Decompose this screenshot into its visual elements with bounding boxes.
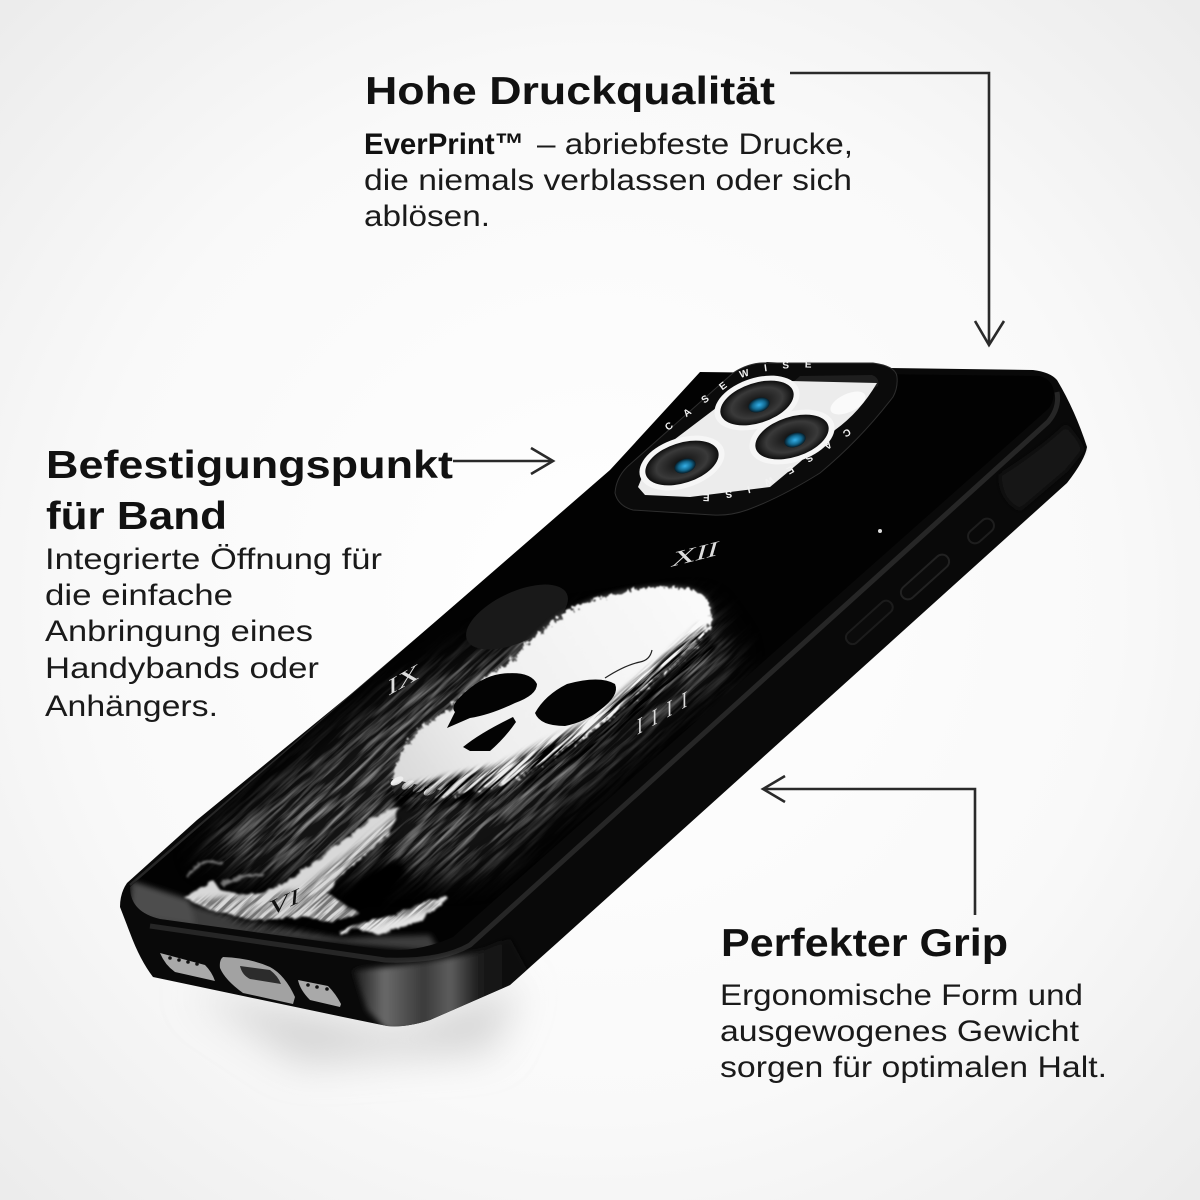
phone body silhouette (120, 362, 1087, 1026)
bottom ports (160, 953, 341, 1007)
callout: strap mount (45, 444, 553, 723)
skull shape (392, 587, 711, 797)
upper side ridge (1000, 425, 1083, 510)
left eye socket (447, 673, 537, 728)
right eye socket (535, 680, 616, 726)
bumper rim line (150, 392, 1058, 960)
bottom corner highlight (354, 944, 530, 1026)
lens top (707, 366, 807, 440)
left speaker (160, 953, 215, 981)
roman numeral XII: XII (669, 536, 722, 572)
bump ring (615, 363, 897, 515)
swirl (187, 862, 265, 885)
central ribbon (183, 807, 400, 923)
body text: ausgewogenes Gewicht (720, 1015, 1080, 1048)
body text: Anbringung eines (45, 615, 313, 648)
skull (392, 587, 711, 797)
camera bump (614, 361, 898, 516)
brand text bottom: CASEWISE (703, 429, 850, 502)
brand text top: CASEWISE (665, 361, 812, 430)
body text: – abriebfeste Drucke, (537, 128, 853, 161)
heading: Hohe Druckqualität (365, 70, 775, 113)
lens left (632, 426, 732, 500)
side button small (965, 516, 997, 546)
body text: die einfache (45, 579, 233, 612)
heading (46, 444, 453, 538)
charging port (220, 957, 295, 1004)
arrow to camera bump (453, 448, 553, 474)
crack (605, 650, 652, 678)
body text (720, 979, 1107, 1084)
skull stem and flames (183, 807, 447, 933)
roman numeral IIII: IIII (637, 686, 687, 740)
roman numeral IX: IX (388, 657, 420, 701)
left rim line (130, 472, 612, 885)
side button volume (843, 598, 895, 647)
right flame (340, 898, 447, 933)
phone case illustration (120, 361, 1087, 1075)
camera window (638, 381, 877, 497)
heading: Perfekter Grip (721, 922, 1008, 965)
body text: EverPrint™ (364, 128, 524, 161)
drop shadow under phone (190, 985, 520, 1062)
dark streak overlay on skull and flame edges (192, 622, 719, 935)
body text: Anhängers. (45, 690, 218, 723)
teeth (388, 776, 440, 800)
inner lip (790, 375, 878, 395)
callout: grip (720, 776, 1107, 1084)
callout: print quality (364, 70, 1004, 345)
body text: die niemals verblassen oder sich (364, 164, 852, 197)
nose cavity (463, 717, 516, 751)
arrow to case top (790, 73, 1004, 345)
stars (878, 529, 882, 533)
dark gap above right flame (341, 858, 408, 914)
heading: für Band (46, 495, 227, 538)
body text: Handybands oder (45, 652, 319, 685)
skull glow (392, 587, 711, 797)
side button long (898, 552, 952, 602)
body text (364, 128, 853, 233)
body text: sorgen für optimalen Halt. (720, 1051, 1107, 1084)
lens right (742, 400, 842, 474)
roman numeral VI: VI (268, 882, 301, 922)
body text: Integrierte Öffnung für (45, 543, 382, 576)
floor haze (130, 880, 440, 952)
dark circle behind skull (466, 584, 568, 650)
body text: ablösen. (364, 200, 490, 233)
front face artwork (130, 372, 882, 950)
flash (827, 387, 869, 419)
side wall details (130, 392, 1083, 960)
arrow to case side (763, 776, 975, 915)
smoke around skull (195, 595, 748, 892)
body text: Ergonomische Form und (720, 979, 1083, 1012)
heading: Befestigungspunkt (46, 444, 453, 487)
right speaker (298, 980, 341, 1007)
body text (45, 543, 382, 723)
